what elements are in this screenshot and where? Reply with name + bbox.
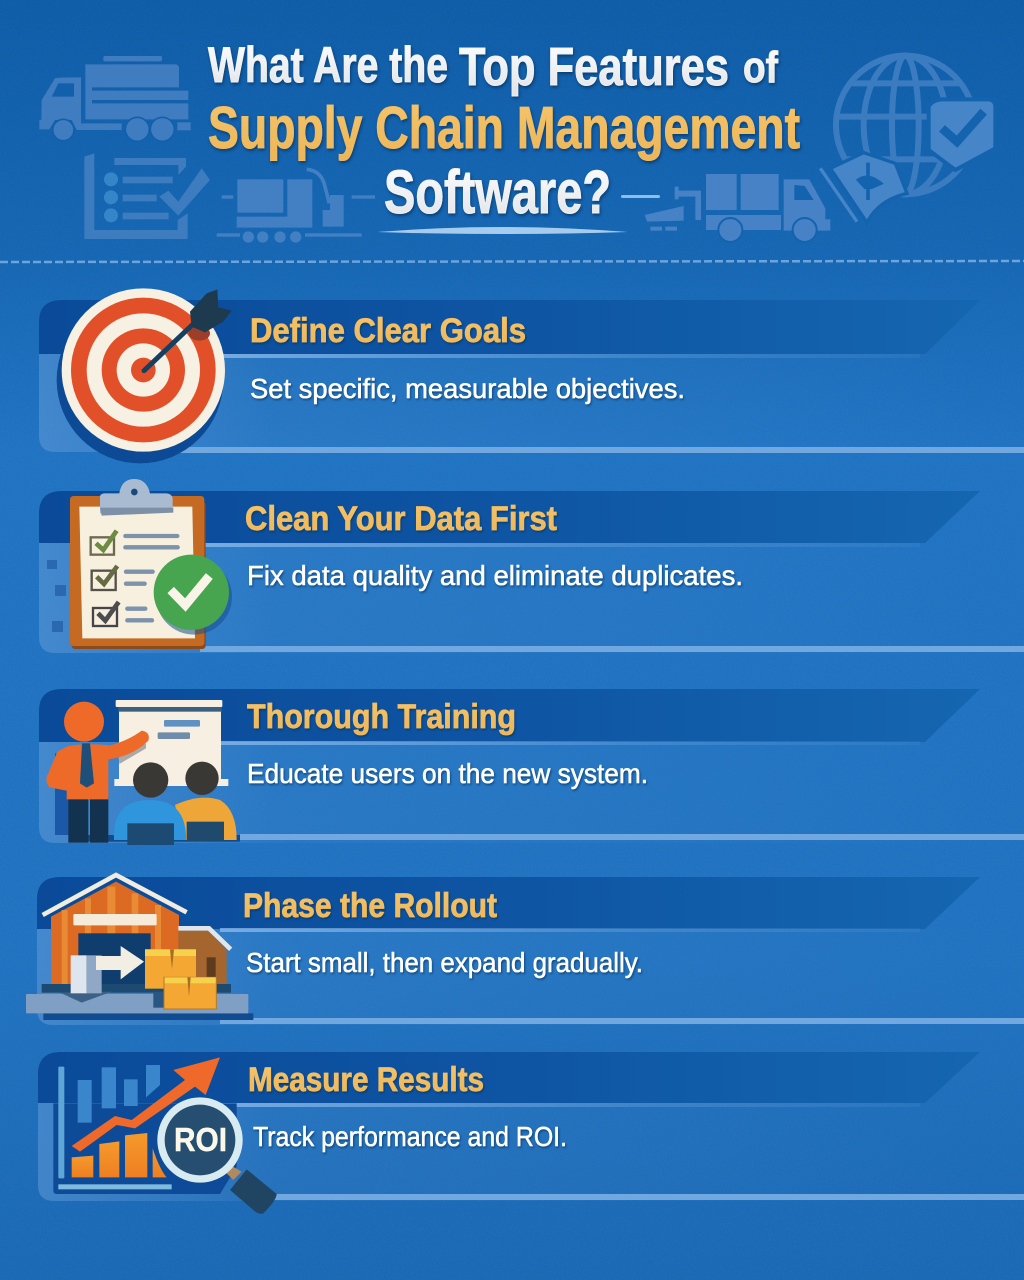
- roi label: ROI: [174, 1121, 227, 1158]
- description: Educate users on the new system.: [247, 758, 648, 789]
- description: Set specific, measurable objectives.: [250, 373, 685, 404]
- icon: globe: [836, 56, 975, 194]
- title: [208, 37, 800, 226]
- title: Software?: [384, 158, 611, 226]
- heading: Measure Results: [248, 1061, 484, 1099]
- heading: Clean Your Data First: [245, 500, 557, 538]
- row background: [38, 1052, 1024, 1201]
- row background: [39, 689, 1024, 843]
- title underline swoosh: [378, 227, 628, 234]
- description: Start small, then expand gradually.: [246, 947, 643, 978]
- title: Top Features: [459, 37, 729, 97]
- icon: cargo truck right: [645, 174, 830, 242]
- title: of: [743, 43, 778, 92]
- icon: warehouse with boxes: [26, 875, 253, 1020]
- title: Supply Chain Management: [208, 95, 800, 161]
- dashed divider: [0, 261, 1024, 262]
- header icons: ghost logistics: [39, 56, 995, 243]
- panel: clean your data first: [39, 479, 1024, 653]
- icon: growth chart with ROI magnifier: [53, 1057, 277, 1214]
- heading: Thorough Training: [247, 698, 516, 736]
- title: What Are the: [208, 37, 448, 93]
- icon: delivery truck left: [39, 56, 191, 141]
- icon: document tag: [820, 153, 907, 223]
- row background: [37, 877, 1024, 1025]
- panel: define clear goals: [39, 288, 1024, 463]
- row background: [39, 300, 1024, 453]
- panel: thorough training: [39, 689, 1024, 845]
- panel: phase the rollout: [26, 875, 1024, 1025]
- row background: [39, 491, 1024, 653]
- icon: target with arrow: [57, 288, 232, 463]
- description: Track performance and ROI.: [253, 1121, 567, 1152]
- panel: measure results: [38, 1052, 1024, 1214]
- icon: presenter with audience: [46, 700, 240, 845]
- icon: clipboard with check: [70, 479, 232, 649]
- icon: pallet truck: [217, 169, 375, 243]
- heading: Phase the Rollout: [243, 887, 497, 925]
- icon: checklist: [84, 153, 210, 239]
- description: Fix data quality and eliminate duplicates.: [247, 560, 743, 591]
- heading: Define Clear Goals: [250, 312, 526, 350]
- icon: shield with check: [929, 99, 995, 170]
- decorative accent dash: [621, 195, 660, 198]
